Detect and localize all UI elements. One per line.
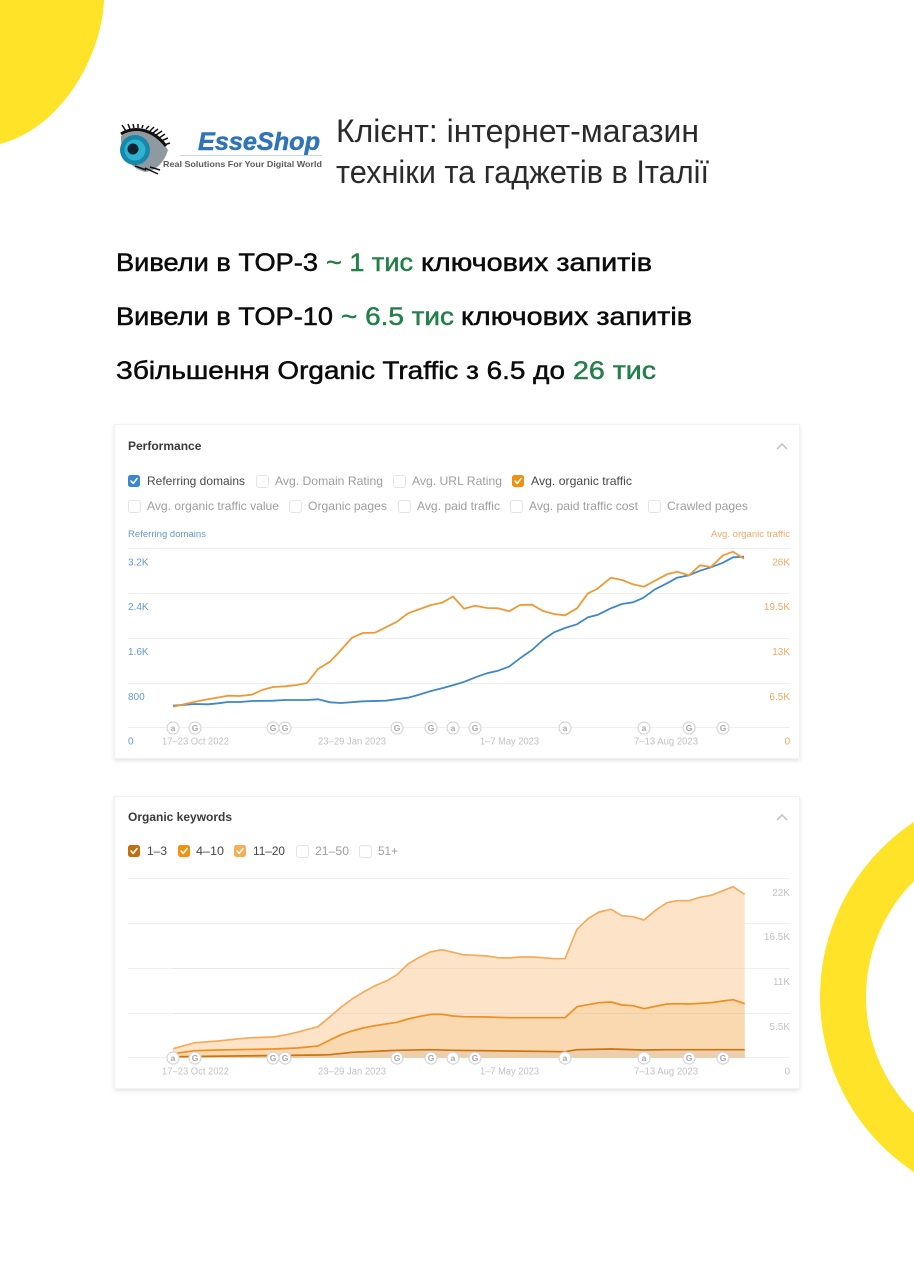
event markers: G: [720, 1053, 727, 1063]
icon: collapse chevron: [777, 444, 787, 449]
x axis dates: 7–13 Aug 2023: [634, 1066, 698, 1078]
legend: position checkboxes: 4–10: [196, 844, 224, 858]
line: positions 1-3: [173, 1049, 745, 1057]
line: organic traffic: [173, 552, 744, 707]
event markers: G: [428, 723, 435, 733]
title: client: техніки та гаджетів в Італії: [336, 154, 709, 190]
heading: organic keywords: Organic keywords: [128, 810, 232, 824]
icon: collapse chevron: [777, 815, 787, 820]
event markers: G: [192, 1053, 199, 1063]
right axis: keywords: 22K: [772, 888, 790, 899]
left axis: referring domains: 800: [128, 692, 145, 703]
key result: TOP-3: Вивели в TOP-3: [116, 249, 318, 277]
legend: metric checkboxes: Avg. URL Rating: [412, 474, 502, 488]
area: positions 11-20: [173, 887, 745, 1058]
legend: metric checkboxes: Avg. organic traffic: [531, 474, 632, 488]
legend: metric checkboxes: [128, 474, 748, 513]
legend: metric checkboxes: Organic pages: [308, 499, 387, 513]
left axis: referring domains: 1.6K: [128, 647, 149, 658]
chart: performance lines: [128, 529, 790, 748]
logo tagline: Real Solutions For Your Digital World: [163, 159, 322, 169]
event markers: G: [428, 1053, 435, 1063]
key result: TOP-10: Вивели в TOP-10: [116, 303, 333, 331]
x axis dates: 1–7 May 2023: [480, 736, 539, 748]
decorative yellow quarter circle: [0, 0, 104, 144]
event markers: G: [270, 723, 277, 733]
x axis dates: 17–23 Oct 2022: [162, 1066, 229, 1078]
x axis dates: 7–13 Aug 2023: [634, 736, 698, 748]
key result: TOP-3: ~ 1 тис: [326, 249, 413, 277]
key result: TOP-10: ключових запитів: [461, 303, 692, 331]
event markers: G: [472, 1053, 479, 1063]
legend: metric checkboxes: Avg. organic traffic value: [147, 499, 279, 513]
right axis: organic traffic: 6.5K: [769, 692, 790, 703]
area: positions 4-10: [173, 1000, 745, 1058]
right axis: organic traffic: 19.5K: [764, 602, 790, 613]
legend: position checkboxes: 11–20: [253, 844, 285, 858]
x axis dates: 1–7 May 2023: [480, 1066, 539, 1078]
event markers: a: [451, 723, 456, 733]
left axis: referring domains: 0: [128, 736, 134, 748]
event markers: G: [394, 723, 401, 733]
right axis: organic traffic: 13K: [772, 647, 790, 658]
title: client: [336, 113, 709, 190]
key result: organic traffic: Збільшення Organic Traffic з 6.5 до: [116, 357, 565, 385]
legend: position checkboxes: 21–50: [315, 844, 349, 858]
event markers: a: [451, 1053, 456, 1063]
x axis dates: 23–29 Jan 2023: [318, 736, 386, 748]
key result: TOP-3: ключових запитів: [421, 249, 652, 277]
left axis: referring domains: 3.2K: [128, 558, 149, 568]
legend: position checkboxes: 51+: [378, 844, 398, 858]
icon: eye: [120, 124, 170, 174]
legend: metric checkboxes: Avg. paid traffic: [417, 499, 500, 513]
chart: performance lines: Avg. organic traffic: [711, 529, 790, 540]
event markers: G: [192, 723, 199, 733]
x axis dates: 17–23 Oct 2022: [162, 736, 229, 748]
event markers: a: [171, 1053, 176, 1063]
event markers: G: [686, 723, 693, 733]
x axis dates: [162, 736, 698, 748]
legend: metric checkboxes: Crawled pages: [667, 499, 748, 513]
right axis: organic traffic: 0: [784, 736, 790, 748]
key result: TOP-3: [116, 249, 652, 277]
chart: organic keywords area: [128, 878, 790, 1078]
title: client: Клієнт: інтернет-магазин: [336, 113, 699, 149]
line: positions 11-20: [173, 887, 745, 1049]
legend: position checkboxes: [128, 844, 398, 858]
decorative yellow ring: [843, 810, 914, 1184]
left axis: referring domains: 2.4K: [128, 602, 149, 613]
x axis dates: [162, 1066, 698, 1078]
event markers: [167, 1052, 729, 1064]
event markers: a: [563, 1053, 568, 1063]
key result: TOP-10: [116, 303, 692, 331]
area: positions 1-3: [173, 1049, 745, 1058]
key result: TOP-10: ~ 6.5 тис: [341, 303, 454, 331]
event markers: a: [563, 723, 568, 733]
panel: organic keywords: [114, 796, 800, 1088]
right axis: organic traffic: [764, 558, 790, 748]
event markers: G: [472, 723, 479, 733]
line: referring domains: [173, 557, 744, 706]
right axis: keywords: 5.5K: [769, 1022, 790, 1033]
logo: EsseShop: [120, 124, 322, 174]
x axis dates: 23–29 Jan 2023: [318, 1066, 386, 1078]
chart: performance lines: Referring domains: [128, 529, 206, 540]
line: positions 4-10: [173, 1000, 745, 1054]
event markers: [167, 722, 729, 734]
right axis: keywords: 11K: [773, 977, 790, 988]
left axis: referring domains: [128, 558, 149, 748]
event markers: G: [720, 723, 727, 733]
event markers: a: [642, 723, 647, 733]
logo wordmark: EsseShop: [198, 128, 320, 156]
legend: metric checkboxes: Avg. paid traffic cost: [529, 499, 639, 513]
key result: organic traffic: 26 тис: [573, 357, 656, 385]
legend: position checkboxes: 1–3: [147, 844, 167, 858]
heading: performance: Performance: [128, 439, 202, 453]
event markers: G: [282, 1053, 289, 1063]
event markers: a: [171, 723, 176, 733]
legend: metric checkboxes: Referring domains: [147, 474, 245, 488]
event markers: G: [270, 1053, 277, 1063]
event markers: G: [282, 723, 289, 733]
event markers: a: [642, 1053, 647, 1063]
event markers: G: [686, 1053, 693, 1063]
right axis: organic traffic: 26K: [772, 558, 790, 568]
right axis: keywords: 0: [784, 1066, 790, 1078]
right axis: keywords: [764, 888, 790, 1078]
event markers: G: [394, 1053, 401, 1063]
panel: performance: [114, 424, 800, 758]
right axis: keywords: 16.5K: [764, 932, 790, 943]
legend: metric checkboxes: Avg. Domain Rating: [275, 474, 383, 488]
